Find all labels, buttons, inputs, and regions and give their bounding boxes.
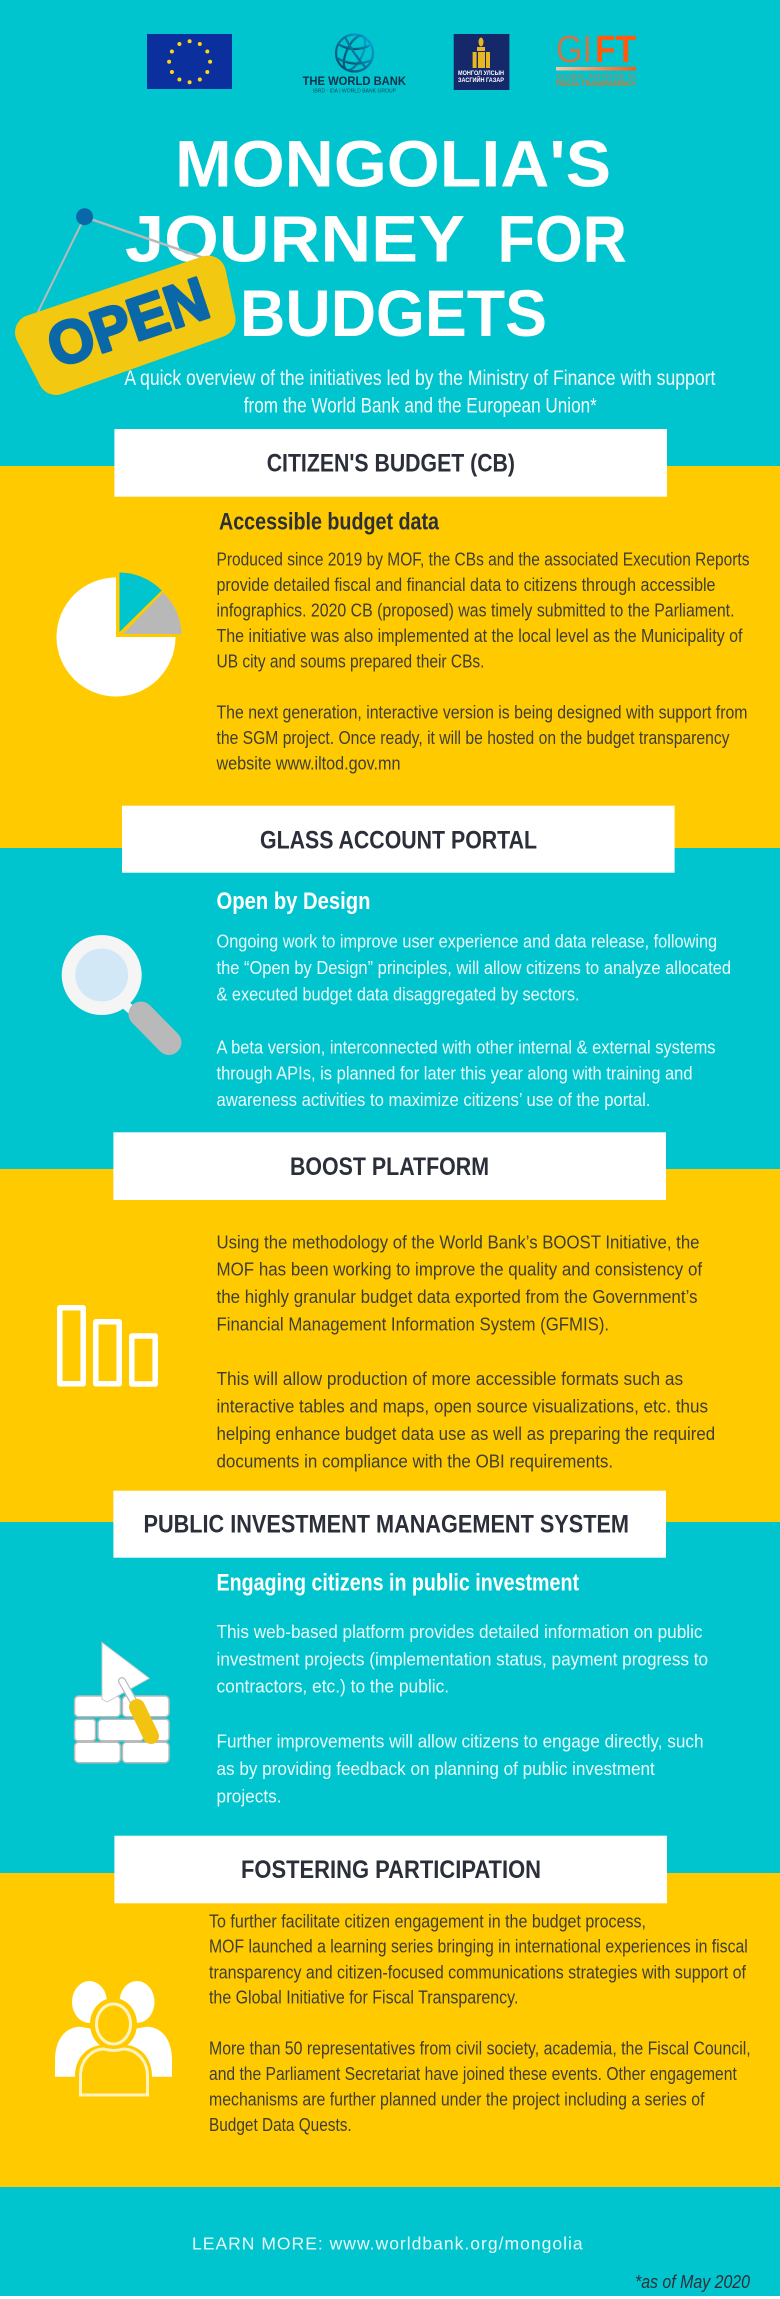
background band: header [0, 0, 780, 466]
background band: citizen's budget [0, 466, 780, 848]
text block: glass account portal: awareness activities to maximize citizens’ use of the portal. [216, 1090, 650, 1110]
text block: boost platform: the highly granular budget data exported from the Government’s [216, 1287, 698, 1307]
logo: European Union flag [147, 34, 232, 89]
footnote: *as of May 2020 [635, 2272, 750, 2292]
subheading: open by design: Open by Design [216, 888, 370, 915]
background band: fostering participation [0, 1873, 780, 2187]
text block: glass account portal: the “Open by Design” principles, will allow citizens to analyze allocated [216, 958, 731, 978]
logo: GIFT: GI [556, 29, 592, 71]
text block: boost platform: Financial Management Information System (GFMIS). [216, 1314, 609, 1334]
logo: Mongolian Ministry: ЗАСГИЙН ГАЗАР [458, 75, 505, 84]
text block: public investment [216, 1622, 708, 1806]
icon: open sign: OPEN [39, 264, 217, 380]
subtitle [124, 367, 716, 418]
text block: public investment: contractors, etc.) to the public. [216, 1677, 449, 1697]
background band: glass account portal [0, 848, 780, 1169]
logo: GIFT: FT [595, 29, 636, 71]
text block: boost platform: documents in compliance with the OBI requirements. [216, 1451, 613, 1471]
text block: boost platform: This will allow production of more accessible formats such as [216, 1369, 683, 1389]
footer link: LEARN MORE: www.worldbank.org/mongolia [192, 2233, 583, 2253]
panel heading: glass account portal: GLASS ACCOUNT PORTAL [260, 826, 537, 854]
text block: boost platform: interactive tables and maps, open source visualizations, etc. thus [216, 1396, 708, 1416]
panel heading: public investment management system [113, 1491, 666, 1558]
panel heading: boost platform [113, 1132, 666, 1200]
logo: Mongolian Ministry [454, 34, 509, 90]
text block: citizen's budget: website www.iltod.gov.mn [216, 753, 400, 773]
text block: citizen's budget: provide detailed fiscal and financial data to citizens through accessible [216, 575, 716, 595]
logo: GIFT: FISCAL TRANSPARENCY [556, 81, 636, 88]
icon: magnifying glass [62, 935, 169, 1042]
panel heading: boost platform: BOOST PLATFORM [290, 1153, 489, 1181]
text block: boost platform: MOF has been working to improve the quality and consistency of [216, 1260, 703, 1280]
icon: bar chart [60, 1308, 155, 1384]
title: JOURNEY [125, 202, 465, 276]
title: FOR [498, 202, 627, 276]
text block: citizen's budget [216, 550, 750, 773]
text block: glass account portal: & executed budget data disaggregated by sectors. [216, 984, 580, 1004]
background band: boost platform [0, 1169, 780, 1522]
text block: public investment: Further improvements will allow citizens to engage directly, such [216, 1732, 704, 1752]
text block: public investment: This web-based platform provides detailed information on public [216, 1622, 702, 1642]
logo: The World Bank [302, 33, 406, 94]
logo: The World Bank: IBRD · IDA | WORLD BANK GROUP [313, 88, 397, 94]
subheading: accessible budget data: Accessible budget data [219, 508, 440, 535]
text block: fostering participation [209, 1911, 751, 2135]
panel heading: glass account portal [122, 806, 675, 873]
logo: The World Bank: THE WORLD BANK [302, 74, 406, 88]
text block: fostering participation: To further facilitate citizen engagement in the budget process, [209, 1911, 646, 1931]
text block: glass account portal: Ongoing work to improve user experience and data release, following [216, 932, 717, 952]
text block: boost platform [216, 1232, 715, 1471]
text block: glass account portal [216, 932, 731, 1110]
title [125, 127, 627, 350]
panel heading: fostering participation [114, 1836, 667, 1903]
logo: GIFT [556, 29, 637, 88]
logo: Mongolian Ministry: МОНГОЛ УЛСЫН [458, 70, 504, 77]
text block: boost platform: helping enhance budget data use as well as preparing the required [216, 1424, 715, 1444]
icon: open sign [33, 208, 218, 380]
panel heading: fostering participation: FOSTERING PARTICIPATION [241, 1856, 541, 1884]
text block: public investment: investment projects (implementation status, payment progress to [216, 1649, 708, 1669]
icon: trowel and bricks [75, 1642, 169, 1763]
text block: public investment: projects. [216, 1786, 282, 1806]
text block: citizen's budget: UB city and soums prepared their CBs. [216, 651, 484, 671]
text block: public investment: as by providing feedback on planning of public investment [216, 1759, 655, 1779]
text block: fostering participation: the Global Initiative for Fiscal Transparency. [209, 1988, 518, 2008]
title: BUDGETS [240, 276, 547, 350]
background band: footer [0, 2187, 780, 2296]
icon: group of people [55, 1981, 172, 2099]
background band: public investment [0, 1522, 780, 1873]
title: MONGOLIA'S [175, 127, 611, 201]
text block: glass account portal: through APIs, is planned for later this year along with training and [216, 1064, 692, 1084]
text block: boost platform: Using the methodology of the World Bank’s BOOST Initiative, the [216, 1232, 700, 1252]
text block: fostering participation: mechanisms are further planned under the project including a series of [209, 2090, 705, 2110]
icon: pie chart [57, 572, 182, 697]
panel heading: citizen's budget: CITIZEN'S BUDGET (CB) [267, 450, 515, 478]
panel heading: public investment management system: PUBLIC INVESTMENT MANAGEMENT SYSTEM [144, 1511, 629, 1539]
subtitle: from the World Bank and the European Union* [244, 395, 597, 418]
logo: GIFT: GLOBAL INITIATIVE for [556, 74, 637, 81]
panel heading: citizen's budget [114, 429, 667, 497]
text block: glass account portal: A beta version, interconnected with other internal & external systems [216, 1037, 716, 1057]
text block: fostering participation: Budget Data Quests. [209, 2115, 352, 2135]
subheading: engaging citizens: Engaging citizens in public investment [216, 1570, 579, 1597]
